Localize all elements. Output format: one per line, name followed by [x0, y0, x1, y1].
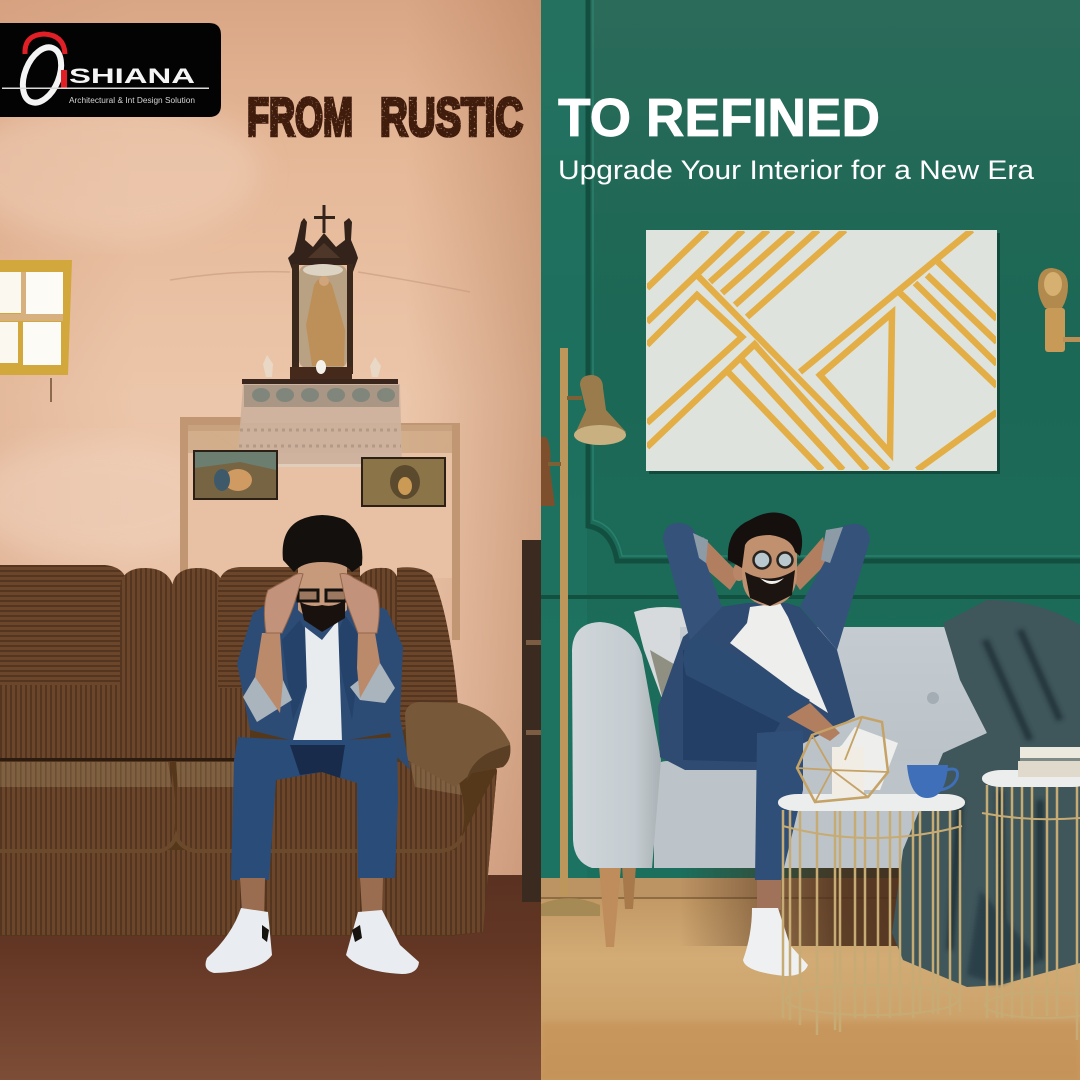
middle row [0, 685, 172, 761]
white t-shirt [730, 603, 828, 713]
grey sofa [572, 607, 990, 947]
white sneakers [206, 908, 419, 974]
shrine base [290, 367, 352, 380]
stressed man on sofa [206, 515, 419, 974]
back cushion one [0, 565, 128, 688]
back leg [683, 650, 780, 762]
sofa arm pad [405, 702, 510, 787]
logo plate [0, 23, 221, 117]
forearm [790, 537, 828, 590]
jeans [231, 737, 398, 880]
back cushion four [218, 567, 360, 690]
back cushion two [120, 568, 174, 692]
cross [314, 205, 335, 233]
sofa back [680, 627, 990, 868]
geometric glass box with cloth [797, 717, 898, 802]
beard and smile [745, 570, 795, 606]
shelf with lace cloth [237, 379, 402, 467]
lamp base [541, 898, 600, 916]
table two [982, 770, 1080, 1040]
glasses [754, 552, 792, 568]
hair [728, 512, 802, 568]
sofa seat [654, 761, 990, 868]
sofa legs [599, 865, 636, 947]
white sneaker [743, 908, 808, 976]
forearms [255, 633, 380, 713]
brand logo [0, 23, 221, 117]
sleeve [663, 523, 722, 640]
white t-shirt [293, 620, 342, 742]
icon: yellow window [0, 260, 72, 402]
hair [283, 515, 362, 572]
relaxed man on sofa [658, 512, 870, 976]
back pillow [634, 607, 690, 720]
back cushion three [172, 568, 220, 688]
stacked books [1018, 747, 1080, 777]
ankles [240, 878, 383, 912]
wall moulding [541, 0, 1080, 597]
glasses [298, 590, 346, 601]
resting forearm [787, 703, 840, 741]
table one [778, 794, 965, 1035]
small lamps [263, 355, 381, 377]
rolled cuffs [243, 663, 395, 722]
icon: wall lamp [1038, 268, 1080, 352]
seat cushions [0, 762, 464, 851]
button tuft [927, 692, 939, 704]
white cloth [835, 727, 898, 790]
wall niche [180, 417, 460, 640]
lower leg [755, 730, 803, 880]
jacket body [658, 603, 855, 770]
framed picture left [193, 450, 278, 500]
sofa base [0, 850, 456, 935]
candle [832, 747, 864, 797]
icon: blue cup [907, 765, 958, 798]
sofa left arm [572, 622, 661, 868]
wood floor [541, 868, 1080, 1080]
icon: floor lamp [541, 348, 626, 916]
jacket collar [282, 615, 362, 720]
sleeve [800, 524, 870, 650]
lamp shade [574, 375, 626, 445]
gold wire [797, 717, 888, 802]
denim jacket [237, 595, 410, 770]
ear [733, 563, 745, 581]
gothic roof [288, 218, 358, 272]
logo tagline: Architectural & Int Design Solution [69, 96, 195, 105]
cuff [821, 527, 843, 563]
green wall [541, 0, 1080, 880]
subheading: Upgrade Your Interior for a New Era [558, 155, 1034, 185]
table top [982, 770, 1080, 787]
lamp arm [567, 396, 582, 400]
raised arm right [790, 524, 870, 650]
heading: from rustic: RUSTIC [380, 88, 523, 148]
bulb [316, 360, 326, 374]
wall shrine [263, 205, 381, 380]
red roof arc [25, 34, 65, 54]
heading: from rustic [247, 88, 523, 148]
wire frame [982, 785, 1080, 1040]
brown sofa [0, 565, 510, 936]
wall art: geometric painting [646, 230, 1000, 474]
heading: to refined: TO REFINED [558, 88, 880, 148]
raised arm left [663, 523, 740, 640]
logo rule [2, 88, 209, 89]
cuff [693, 533, 708, 563]
right panel: refined room [541, 0, 1080, 1080]
sofa wing [397, 567, 458, 740]
left panel: rustic room [0, 0, 541, 1080]
head [742, 528, 797, 606]
dark throw blanket [892, 600, 1080, 987]
rustic wall [0, 0, 541, 880]
second lamp head at seam [541, 437, 561, 506]
red accent [61, 70, 67, 88]
white ring A mark [15, 42, 69, 108]
ankle [757, 880, 781, 910]
head [298, 560, 347, 632]
beard [300, 600, 345, 632]
glass case [292, 264, 353, 374]
dark cabinet [522, 540, 541, 902]
wire frame [783, 810, 962, 1035]
sofa body [0, 726, 497, 936]
crossed thigh [683, 637, 810, 723]
heading: from rustic: FROM [247, 88, 353, 148]
rustic floor [0, 875, 541, 1080]
framed picture right [361, 457, 446, 507]
hands [264, 574, 379, 633]
brand name: SHIANA [69, 65, 195, 88]
forearm [698, 537, 740, 590]
table top [778, 794, 965, 811]
